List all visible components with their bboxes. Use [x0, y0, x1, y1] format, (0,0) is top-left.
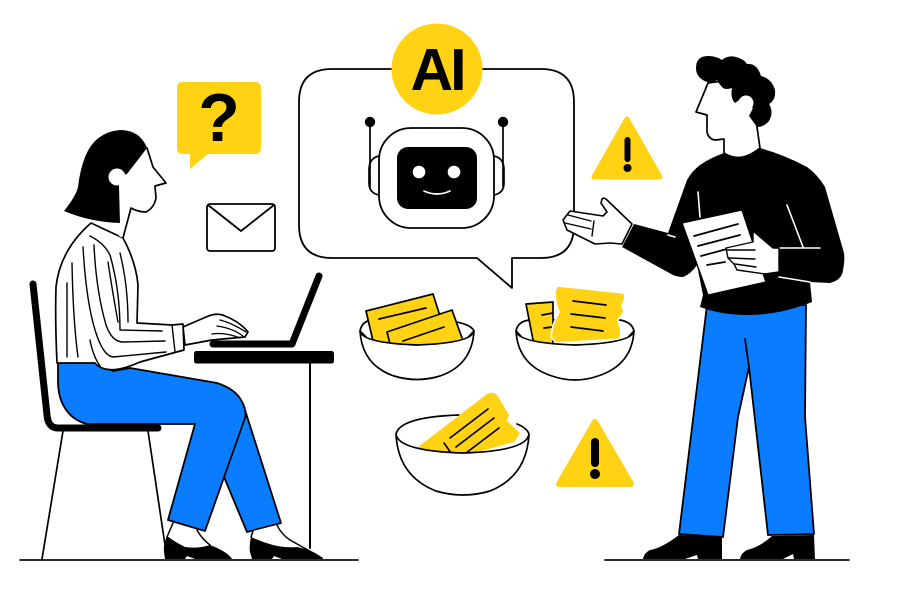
- floor line left: [20, 559, 358, 561]
- ear: [108, 168, 126, 186]
- neck and face: [119, 148, 166, 238]
- hand: [183, 314, 248, 345]
- warning large: [559, 422, 631, 484]
- trousers: [679, 305, 814, 537]
- laptop: [213, 276, 319, 344]
- back leg trousers: [224, 410, 281, 532]
- bowl 3: [396, 393, 529, 495]
- sweater: [622, 148, 844, 315]
- shoes and feet: [164, 523, 323, 559]
- question mark: ?: [198, 80, 240, 156]
- envelope: [207, 204, 275, 251]
- floor line right: [605, 559, 849, 561]
- right hand holding document: [726, 231, 779, 274]
- AI badge: AI: [410, 37, 464, 103]
- AI badge: [392, 24, 482, 114]
- desk: [194, 351, 334, 548]
- bowl 1: [360, 294, 474, 380]
- sweater highlights: [668, 192, 820, 282]
- chair: [33, 284, 165, 559]
- neck and head: [696, 80, 760, 157]
- curly hair: [696, 56, 775, 127]
- left open hand: [563, 198, 632, 244]
- warning small: [594, 119, 660, 177]
- document: [682, 210, 766, 295]
- front leg trousers: [58, 363, 246, 531]
- hair: [64, 130, 147, 223]
- speech bubble: [299, 69, 574, 288]
- striped sweater: [56, 223, 184, 370]
- man: [563, 56, 844, 559]
- woman: [56, 130, 323, 559]
- ear: [738, 96, 754, 110]
- bowl 2: [516, 286, 634, 380]
- robot: [365, 117, 508, 228]
- question bubble: [177, 80, 261, 169]
- shoes: [643, 535, 815, 559]
